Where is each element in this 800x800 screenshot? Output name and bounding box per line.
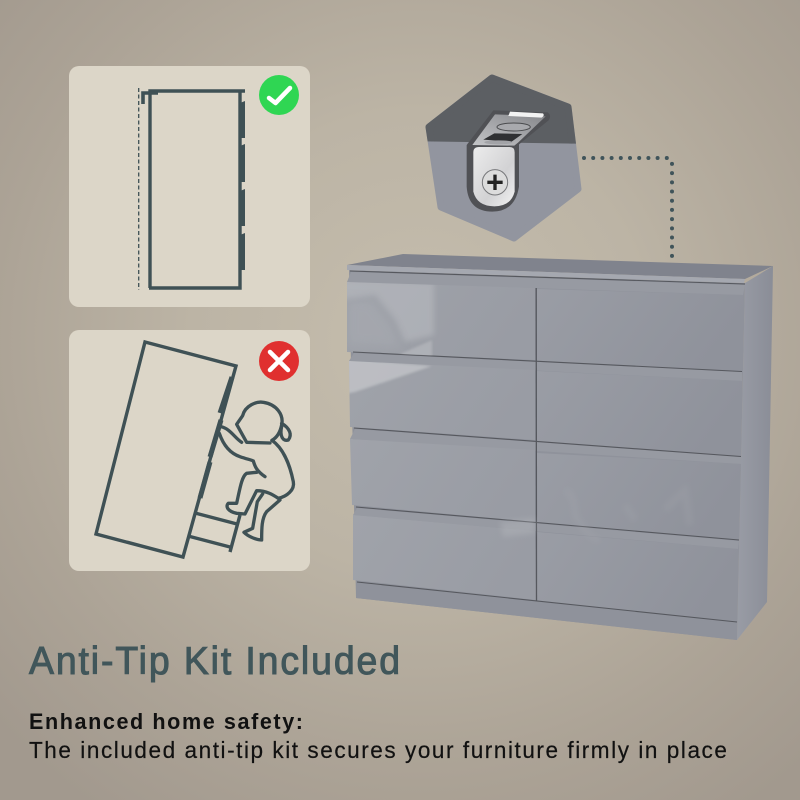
icon: red cross [259, 341, 299, 381]
icon: climbing child [219, 402, 294, 540]
drawers: left column [347, 282, 536, 600]
body text: The included anti-tip kit secures your furniture firmly in place [29, 737, 727, 763]
panel: incorrect climbing [69, 330, 310, 571]
icon: tipping dresser [96, 342, 240, 557]
gap lines over drawers [350, 271, 745, 622]
dresser top front edge [347, 265, 745, 283]
bracket [467, 110, 550, 212]
drawer reflections [347, 282, 588, 534]
connector: dotted line [584, 158, 672, 262]
panel: correct installation [69, 66, 310, 307]
dresser plinth [356, 583, 737, 640]
dresser top surface [347, 254, 773, 279]
dresser side [737, 266, 773, 640]
title: Anti-Tip Kit Included [29, 639, 400, 683]
callout: anti-tip bracket hexagon [429, 78, 578, 238]
panel background: correct [69, 66, 310, 307]
dresser carcass [349, 270, 745, 640]
dresser [340, 254, 773, 640]
recess strips [347, 272, 745, 549]
panel background: incorrect [69, 330, 310, 571]
subheading: Enhanced home safety: [29, 709, 303, 734]
icon: dresser anchored to wall [139, 88, 245, 290]
hexagon dark top [426, 74, 576, 144]
hexagon background [429, 78, 578, 238]
icon: green check [259, 75, 299, 115]
drawers: right column [537, 289, 743, 622]
